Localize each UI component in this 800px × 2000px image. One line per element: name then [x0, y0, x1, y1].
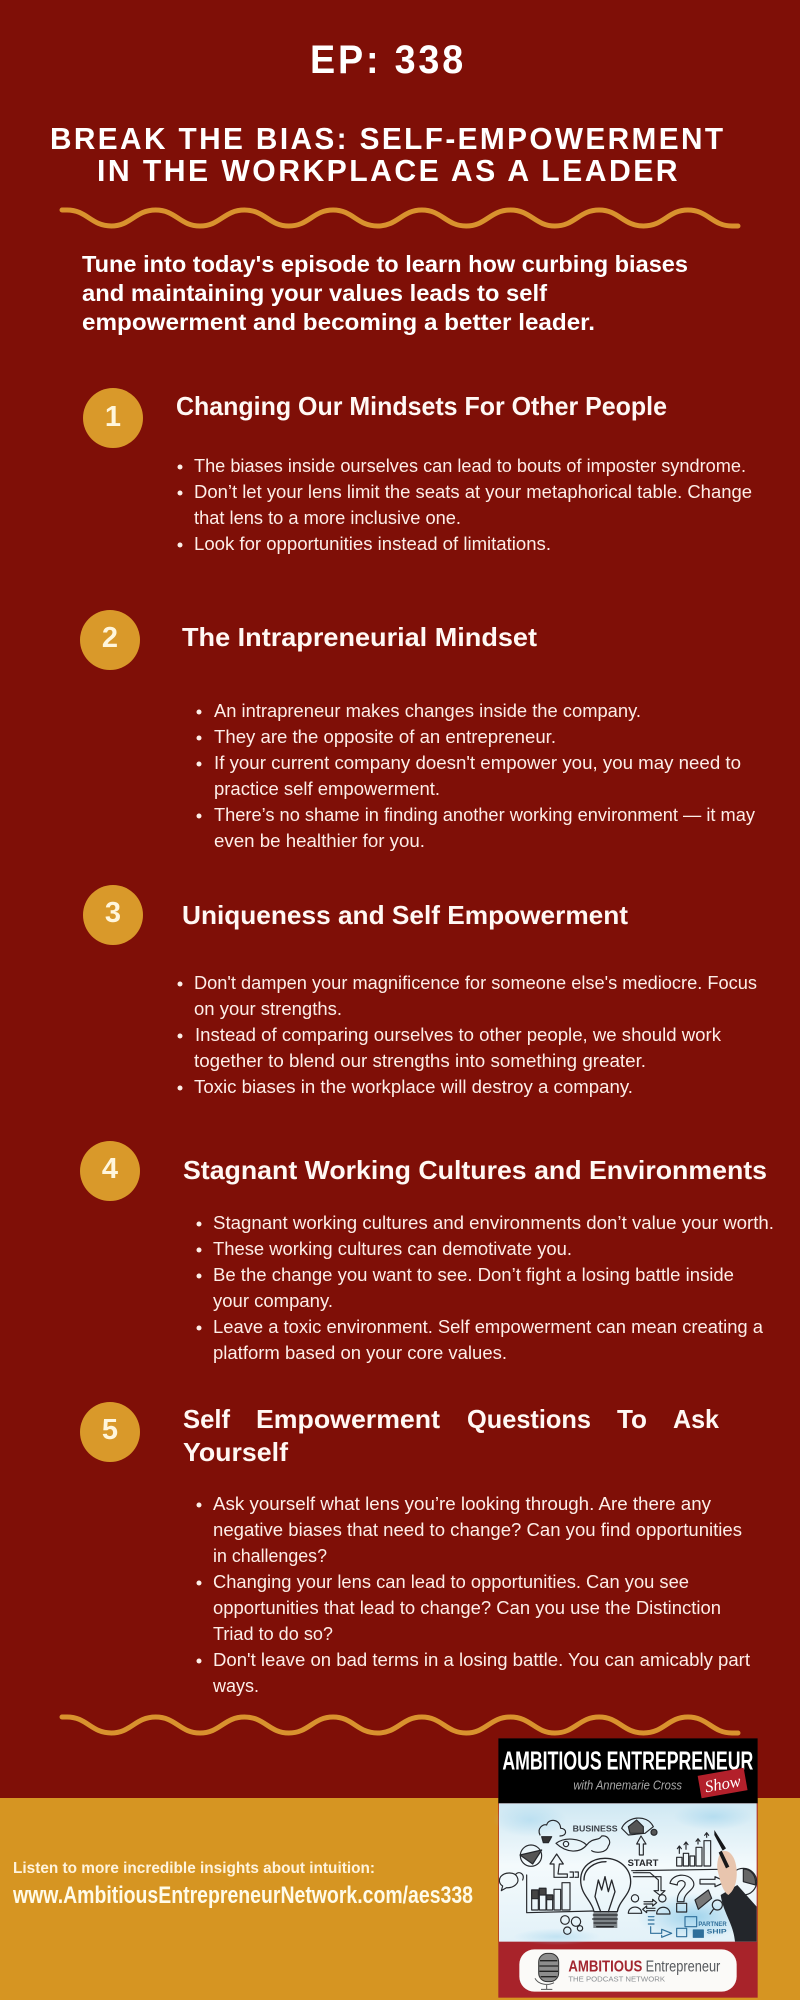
bullets 5: in challenges?	[213, 1545, 327, 1566]
section 5	[80, 1402, 750, 1696]
intro text: empowerment and becoming a better leader.	[82, 309, 595, 335]
gears sketch	[561, 1916, 583, 1934]
number badge 2	[80, 610, 140, 670]
cover logo pill: AMBITIOUS	[568, 1959, 643, 1976]
podcast cover artwork	[493, 1738, 758, 1998]
number badge 3: 3	[105, 897, 121, 929]
bullets 4: Leave a toxic environment. Self empowerment can mean creating a	[213, 1316, 764, 1337]
intro text: Tune into today's episode to learn how curbing biases	[82, 251, 688, 277]
bullets 2: even be healthier for you.	[214, 830, 425, 851]
bullets 1: Look for opportunities instead of limitations.	[194, 533, 551, 554]
bullets 3: together to blend our strengths into something greater.	[194, 1050, 646, 1071]
bullets 4: These working cultures can demotivate you.	[213, 1238, 572, 1259]
footer call to action: www.AmbitiousEntrepreneurNetwork.com/aes338	[12, 1882, 473, 1909]
bullets 4: Be the change you want to see. Don’t fight a losing battle inside	[213, 1264, 734, 1285]
bullets 5: Changing your lens can lead to opportunities. Can you see	[213, 1571, 689, 1592]
number badge 1	[83, 388, 143, 448]
section 3	[83, 885, 757, 1097]
footer call to action	[12, 1860, 473, 1909]
bullets 1: that lens to a more inclusive one.	[194, 507, 461, 528]
gauge sketch	[520, 1845, 542, 1866]
number badge 3	[83, 885, 143, 945]
bullets 2: An intrapreneur makes changes inside the company.	[214, 700, 641, 721]
title: BREAK THE BIAS: SELF-EMPOWERMENT	[50, 121, 726, 156]
section 1	[83, 388, 752, 554]
cover logo pill	[519, 1949, 737, 1992]
hand with pen	[714, 1830, 757, 1942]
number badge 1: 1	[105, 401, 121, 433]
heading 5: Ask	[673, 1404, 720, 1434]
cover header	[498, 1738, 758, 1803]
partnership label: PARTNER	[698, 1921, 727, 1928]
cover logo pill: THE PODCAST NETWORK	[568, 1975, 665, 1984]
start label: START	[628, 1858, 659, 1868]
bullets 4	[196, 1212, 774, 1363]
heading 5	[183, 1404, 720, 1467]
title: IN THE WORKPLACE AS A LEADER	[97, 153, 680, 188]
heading 2: The Intrapreneurial Mindset	[182, 622, 537, 652]
bullets 4: platform based on your core values.	[213, 1342, 507, 1363]
cover logo pill: Entrepreneur	[646, 1959, 720, 1976]
microphone icon	[535, 1953, 559, 1989]
bullets 1	[178, 455, 752, 554]
bullets 1: The biases inside ourselves can lead to bouts of imposter syndrome.	[194, 455, 746, 476]
pie chart sketch	[730, 1868, 757, 1895]
bullets 5: negative biases that need to change? Can you find opportunities	[213, 1519, 742, 1540]
title	[50, 121, 726, 188]
show badge	[698, 1768, 748, 1798]
bullets 2: practice self empowerment.	[214, 778, 440, 799]
bottom wavy divider	[62, 1717, 738, 1733]
bullets 3	[178, 972, 757, 1097]
number badge 4: 4	[102, 1153, 118, 1185]
heading 3: Uniqueness and Self Empowerment	[182, 900, 628, 930]
cloud and rocket sketch	[539, 1820, 610, 1852]
bullets 3: on your strengths.	[194, 998, 342, 1019]
bullets 2	[196, 700, 756, 851]
arrows and question mark sketch	[633, 1873, 726, 1912]
bullets 2: If your current company doesn't empower you, you may need to	[214, 752, 741, 773]
footer band	[0, 1798, 800, 2000]
bullets 5: Triad to do so?	[213, 1623, 333, 1644]
section 4	[80, 1141, 774, 1363]
bullets 1: Don’t let your lens limit the seats at your metaphorical table. Change	[194, 481, 752, 502]
people exchange sketch	[628, 1895, 670, 1914]
left bar chart sketch	[527, 1875, 593, 1913]
heading 5: Empowerment	[256, 1404, 440, 1434]
section 2	[80, 610, 756, 851]
bullets 4: Stagnant working cultures and environments don’t value your worth.	[213, 1212, 774, 1233]
bullets 5	[196, 1493, 750, 1696]
sketch illustration	[493, 1803, 757, 1945]
heading 5: Questions	[467, 1404, 591, 1434]
bullets 3: Toxic biases in the workplace will destroy a company.	[194, 1076, 633, 1097]
bullets 3: Instead of comparing ourselves to other people, we should work	[195, 1024, 722, 1045]
money and magnifier sketch	[695, 1890, 722, 1914]
business label: BUSINESS	[573, 1823, 618, 1833]
intro text: and maintaining your values leads to self	[82, 280, 547, 306]
number badge 2: 2	[102, 622, 118, 654]
right bar chart sketch	[632, 1833, 720, 1871]
bullets 5: Ask yourself what lens you’re looking through. Are there any	[213, 1493, 712, 1514]
footer call to action: Listen to more incredible insights about intuition:	[13, 1860, 375, 1877]
lightbulb sketch	[581, 1858, 631, 1928]
heading 5: Yourself	[183, 1437, 288, 1467]
number badge 5	[80, 1402, 140, 1462]
intro text	[82, 251, 688, 335]
bullets 2: They are the opposite of an entrepreneur.	[214, 726, 556, 747]
bullets 5: Don't leave on bad terms in a losing battle. You can amicably part	[213, 1649, 750, 1670]
up arrow sketch	[550, 1854, 578, 1877]
bullets 5: opportunities that lead to change? Can you use the Distinction	[213, 1597, 721, 1618]
number badge 4	[80, 1141, 140, 1201]
heading 1: Changing Our Mindsets For Other People	[176, 391, 667, 421]
speech bubbles sketch	[499, 1873, 523, 1891]
show badge: Show	[703, 1771, 742, 1796]
bullets 3: Don't dampen your magnificence for someone else's mediocre. Focus	[194, 972, 757, 993]
cover header: with Annemarie Cross	[573, 1777, 682, 1792]
heading 4: Stagnant Working Cultures and Environments	[183, 1155, 767, 1185]
heading 5: Self	[183, 1404, 230, 1434]
episode number: EP: 338	[310, 38, 466, 82]
number badge 5: 5	[102, 1414, 118, 1446]
bullets 4: your company.	[213, 1290, 333, 1311]
bullets 5: ways.	[212, 1675, 259, 1696]
heading 5: To	[617, 1404, 647, 1434]
bullets 2: There’s no shame in finding another working environment — it may	[214, 804, 756, 825]
puzzle flow sketch	[648, 1917, 703, 1937]
top wavy divider	[62, 210, 738, 226]
sketch illustration: SHIP	[707, 1928, 727, 1935]
house sketch	[622, 1818, 657, 1855]
